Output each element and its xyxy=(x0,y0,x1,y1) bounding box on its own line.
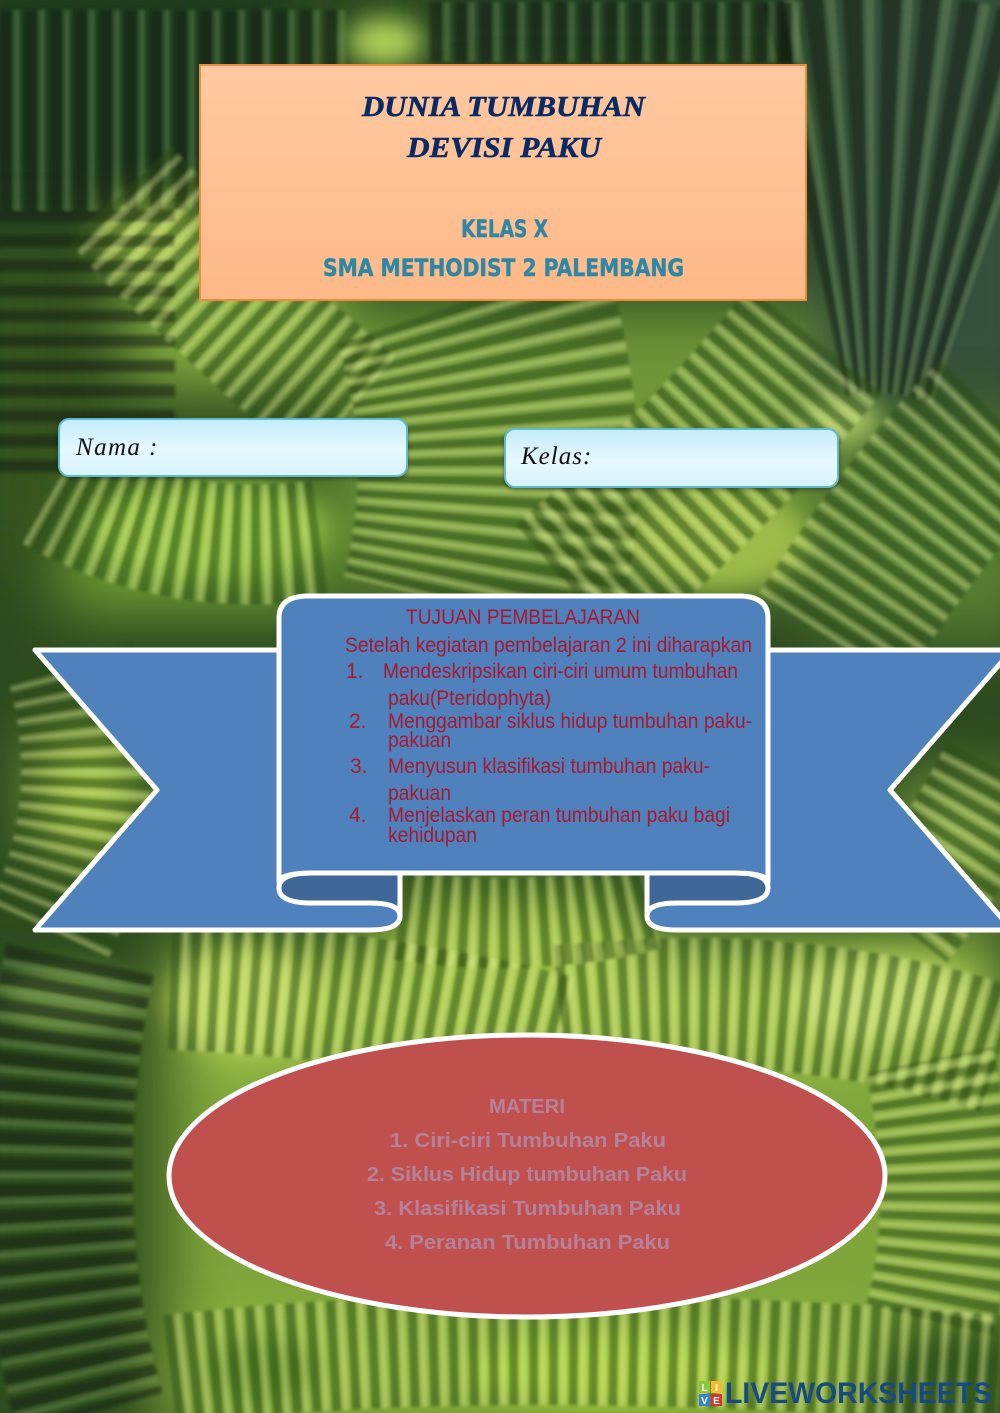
logo: Liveworksheets: V xyxy=(701,1396,708,1407)
subtitle: school name: SMA METHODIST 2 PALEMBANG xyxy=(323,254,684,282)
objectives text: paku(Pteridophyta) xyxy=(388,687,551,710)
materials list: MATERI xyxy=(489,1096,565,1118)
class field xyxy=(504,428,839,488)
materials list: 2. Siklus Hidup tumbuhan Paku xyxy=(367,1164,687,1186)
title: Devisi Paku: DEVISI PAKU xyxy=(406,132,603,164)
objectives text: kehidupan xyxy=(388,824,477,847)
objectives text: pakuan xyxy=(388,782,451,805)
objectives text: 4. xyxy=(349,804,367,827)
objectives text: Menggambar siklus hidup tumbuhan paku- xyxy=(388,710,752,733)
materials list xyxy=(367,1096,687,1254)
name field: Nama : xyxy=(76,434,159,461)
objectives text xyxy=(345,606,752,847)
title: Dunia Tumbuhan: DUNIA TUMBUHAN xyxy=(361,91,646,123)
objectives text: 2. xyxy=(349,710,367,733)
class field: Kelas: xyxy=(521,443,592,470)
subtitle: Kelas X: KELAS X xyxy=(461,215,548,243)
objectives text: Setelah kegiatan pembelajaran 2 ini diharapkan xyxy=(345,634,752,657)
ribbon left tail xyxy=(35,650,400,930)
objectives text: Mendeskripsikan ciri-ciri umum tumbuhan xyxy=(383,660,738,683)
logo: Liveworksheets: E xyxy=(713,1396,720,1407)
logo: Liveworksheets: L xyxy=(701,1383,708,1394)
objectives text: TUJUAN PEMBELAJARAN xyxy=(406,606,640,629)
objectives text: Menjelaskan peran tumbuhan paku bagi xyxy=(388,804,730,827)
objectives text: Menyusun klasifikasi tumbuhan paku- xyxy=(388,755,710,778)
ribbon right fold xyxy=(647,873,768,916)
materials list: 3. Klasifikasi Tumbuhan Paku xyxy=(374,1198,681,1220)
objectives text: 3. xyxy=(350,755,368,778)
ribbon left fold xyxy=(279,873,400,916)
objectives text: pakuan xyxy=(388,729,451,752)
logo: Liveworksheets: I xyxy=(715,1383,718,1394)
logo: Liveworksheets: LIVEWORKSHEETS xyxy=(725,1377,992,1410)
ribbon right tail xyxy=(647,650,1000,930)
materials list: 1. Ciri-ciri Tumbuhan Paku xyxy=(390,1130,666,1152)
ribbon main panel xyxy=(279,596,768,880)
objectives text: 1. xyxy=(346,660,364,683)
name field xyxy=(58,418,408,477)
materials list: 4. Peranan Tumbuhan Paku xyxy=(385,1232,670,1254)
